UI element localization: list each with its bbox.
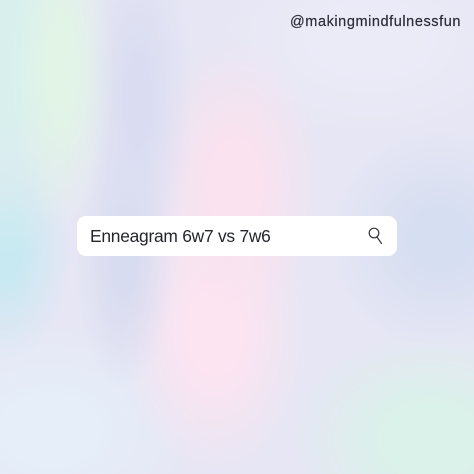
- social handle: @makingmindfulnessfun: [290, 14, 461, 30]
- search query text: Enneagram 6w7 vs 7w6: [90, 226, 271, 246]
- icon: magnifying glass: [368, 228, 382, 244]
- search bar: [77, 216, 397, 256]
